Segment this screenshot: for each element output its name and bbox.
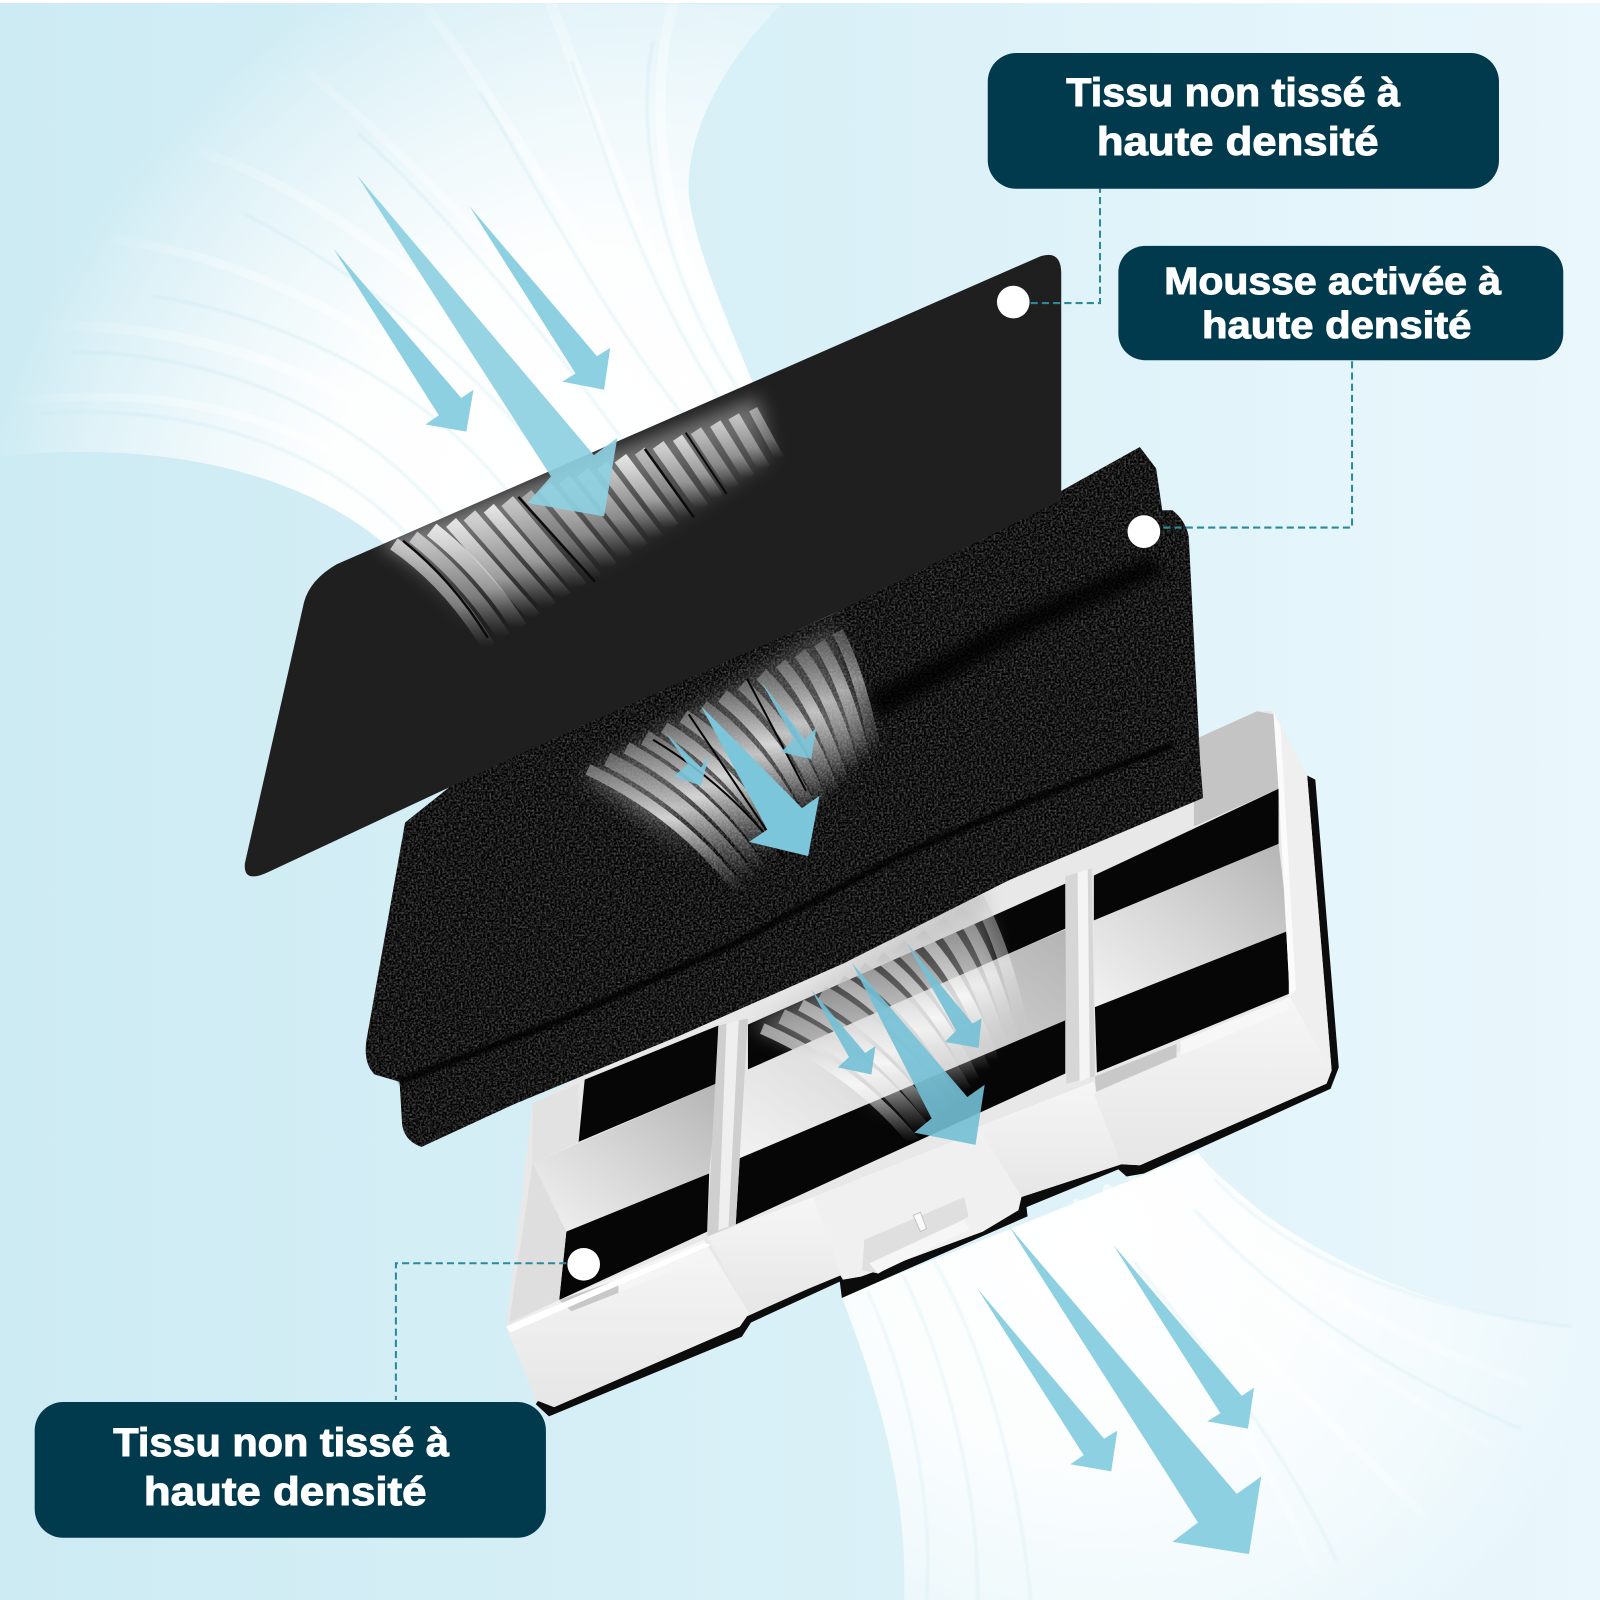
ribs <box>707 868 1095 1237</box>
callout: top fabric label: Tissu non tissé à <box>1066 71 1401 115</box>
foam layer seam <box>399 745 1172 1082</box>
arrow: right outgoing <box>1113 1245 1254 1429</box>
arrows: incoming air <box>334 176 617 516</box>
airflow: thin blue lines in outgoing wind <box>867 1179 1571 1600</box>
front wall right of clip <box>979 1082 1121 1197</box>
right wall and rim <box>1273 711 1332 1070</box>
foam airflow streaks <box>581 623 876 895</box>
callout: top fabric label <box>988 53 1499 189</box>
arrow: left tray <box>811 990 876 1074</box>
arrow: right foam <box>761 682 816 759</box>
arrow: right incoming <box>469 206 610 390</box>
arrows: through foam <box>665 682 819 856</box>
marker dot: tray fabric <box>567 1248 600 1281</box>
foam layers: activated high-density foam <box>366 447 1203 1147</box>
callout connector: foam <box>1163 360 1352 528</box>
filter tray: plastic frame with black filter fabric <box>506 711 1339 1416</box>
fabric windows <box>559 789 1289 1300</box>
inner left wall <box>533 1084 579 1163</box>
arrow: right tray <box>907 944 982 1048</box>
callout: foam label: Mousse activée à <box>1164 260 1502 302</box>
callout: tray fabric label: Tissu non tissé à <box>113 1421 450 1465</box>
arrow: left incoming <box>334 249 473 432</box>
callout: foam label: haute densité <box>1202 304 1471 346</box>
marker dot: foam <box>1128 515 1160 548</box>
callout: tray fabric label: haute densité <box>144 1470 427 1514</box>
callout connector: top fabric <box>1031 189 1100 303</box>
panel airflow streaks <box>378 398 780 653</box>
foam dark recess <box>865 556 1163 719</box>
arrow: large outgoing <box>1009 1227 1261 1554</box>
callout: foam label <box>1118 246 1563 360</box>
tray base <box>506 711 1332 1407</box>
airflow: incoming wind streaks <box>0 0 781 545</box>
arrow: left foam <box>665 733 709 786</box>
clip latch <box>813 1127 1021 1280</box>
arrow: large tray <box>852 963 985 1145</box>
top panel: high-density non-woven fabric sheet <box>245 255 1061 876</box>
arrow: left outgoing <box>978 1289 1117 1471</box>
airflow: outgoing wind streaks <box>842 1153 1600 1600</box>
airflow: thin blue lines in incoming wind <box>41 41 750 536</box>
arrow: large foam <box>701 706 819 856</box>
callout: tray fabric label <box>35 1402 546 1538</box>
arrows: through tray <box>811 944 985 1145</box>
front wall right <box>1094 997 1332 1165</box>
front wall middle <box>707 1197 843 1313</box>
arrow: large incoming <box>357 176 617 516</box>
rear foam layer <box>399 510 1203 1147</box>
inner panels <box>1094 844 1289 1007</box>
front foam layer <box>366 447 1172 1082</box>
front wall left <box>506 1240 749 1407</box>
tray black backing <box>536 776 1339 1416</box>
marker dot: top fabric <box>997 286 1030 318</box>
callout: top fabric label: haute densité <box>1097 120 1379 164</box>
arrows: outgoing air <box>978 1227 1261 1554</box>
tray airflow streaks <box>750 881 1022 1148</box>
callout connector: tray fabric <box>396 1263 566 1400</box>
